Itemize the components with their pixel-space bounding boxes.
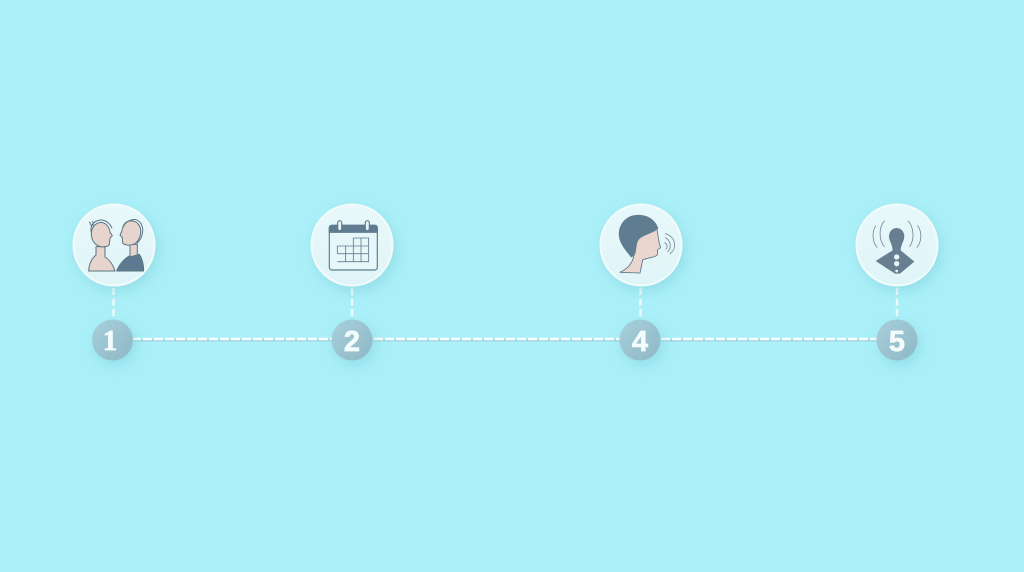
icon: person broadcasting (873, 221, 921, 274)
number badge 4 (620, 320, 660, 360)
number 2: 2 (344, 326, 360, 358)
connector 5 (896, 288, 898, 319)
step 4 (600, 204, 682, 360)
step 5 (856, 204, 938, 360)
number badge 5 (876, 320, 918, 360)
number 5: 5 (889, 326, 905, 358)
sound wave arcs (665, 243, 667, 249)
step 2 (312, 204, 392, 360)
icon: head speaking (619, 215, 675, 273)
icon disc 1 (74, 204, 154, 286)
number badge 2 (332, 320, 372, 360)
number 1: 1 (103, 325, 117, 357)
connector 4 (639, 288, 642, 319)
icon disc 2 (312, 204, 392, 286)
connector 1 (112, 288, 115, 319)
icon: calendar (329, 221, 377, 270)
connector 2 (351, 288, 353, 319)
icon disc 5 (856, 204, 938, 286)
timeline line (132, 339, 878, 340)
step 1 (74, 204, 154, 360)
number badge 1 (92, 320, 133, 360)
icon disc 4 (600, 204, 682, 286)
number 4: 4 (632, 326, 648, 358)
broadcast arcs (873, 226, 877, 247)
icon: two people facing (89, 220, 144, 271)
